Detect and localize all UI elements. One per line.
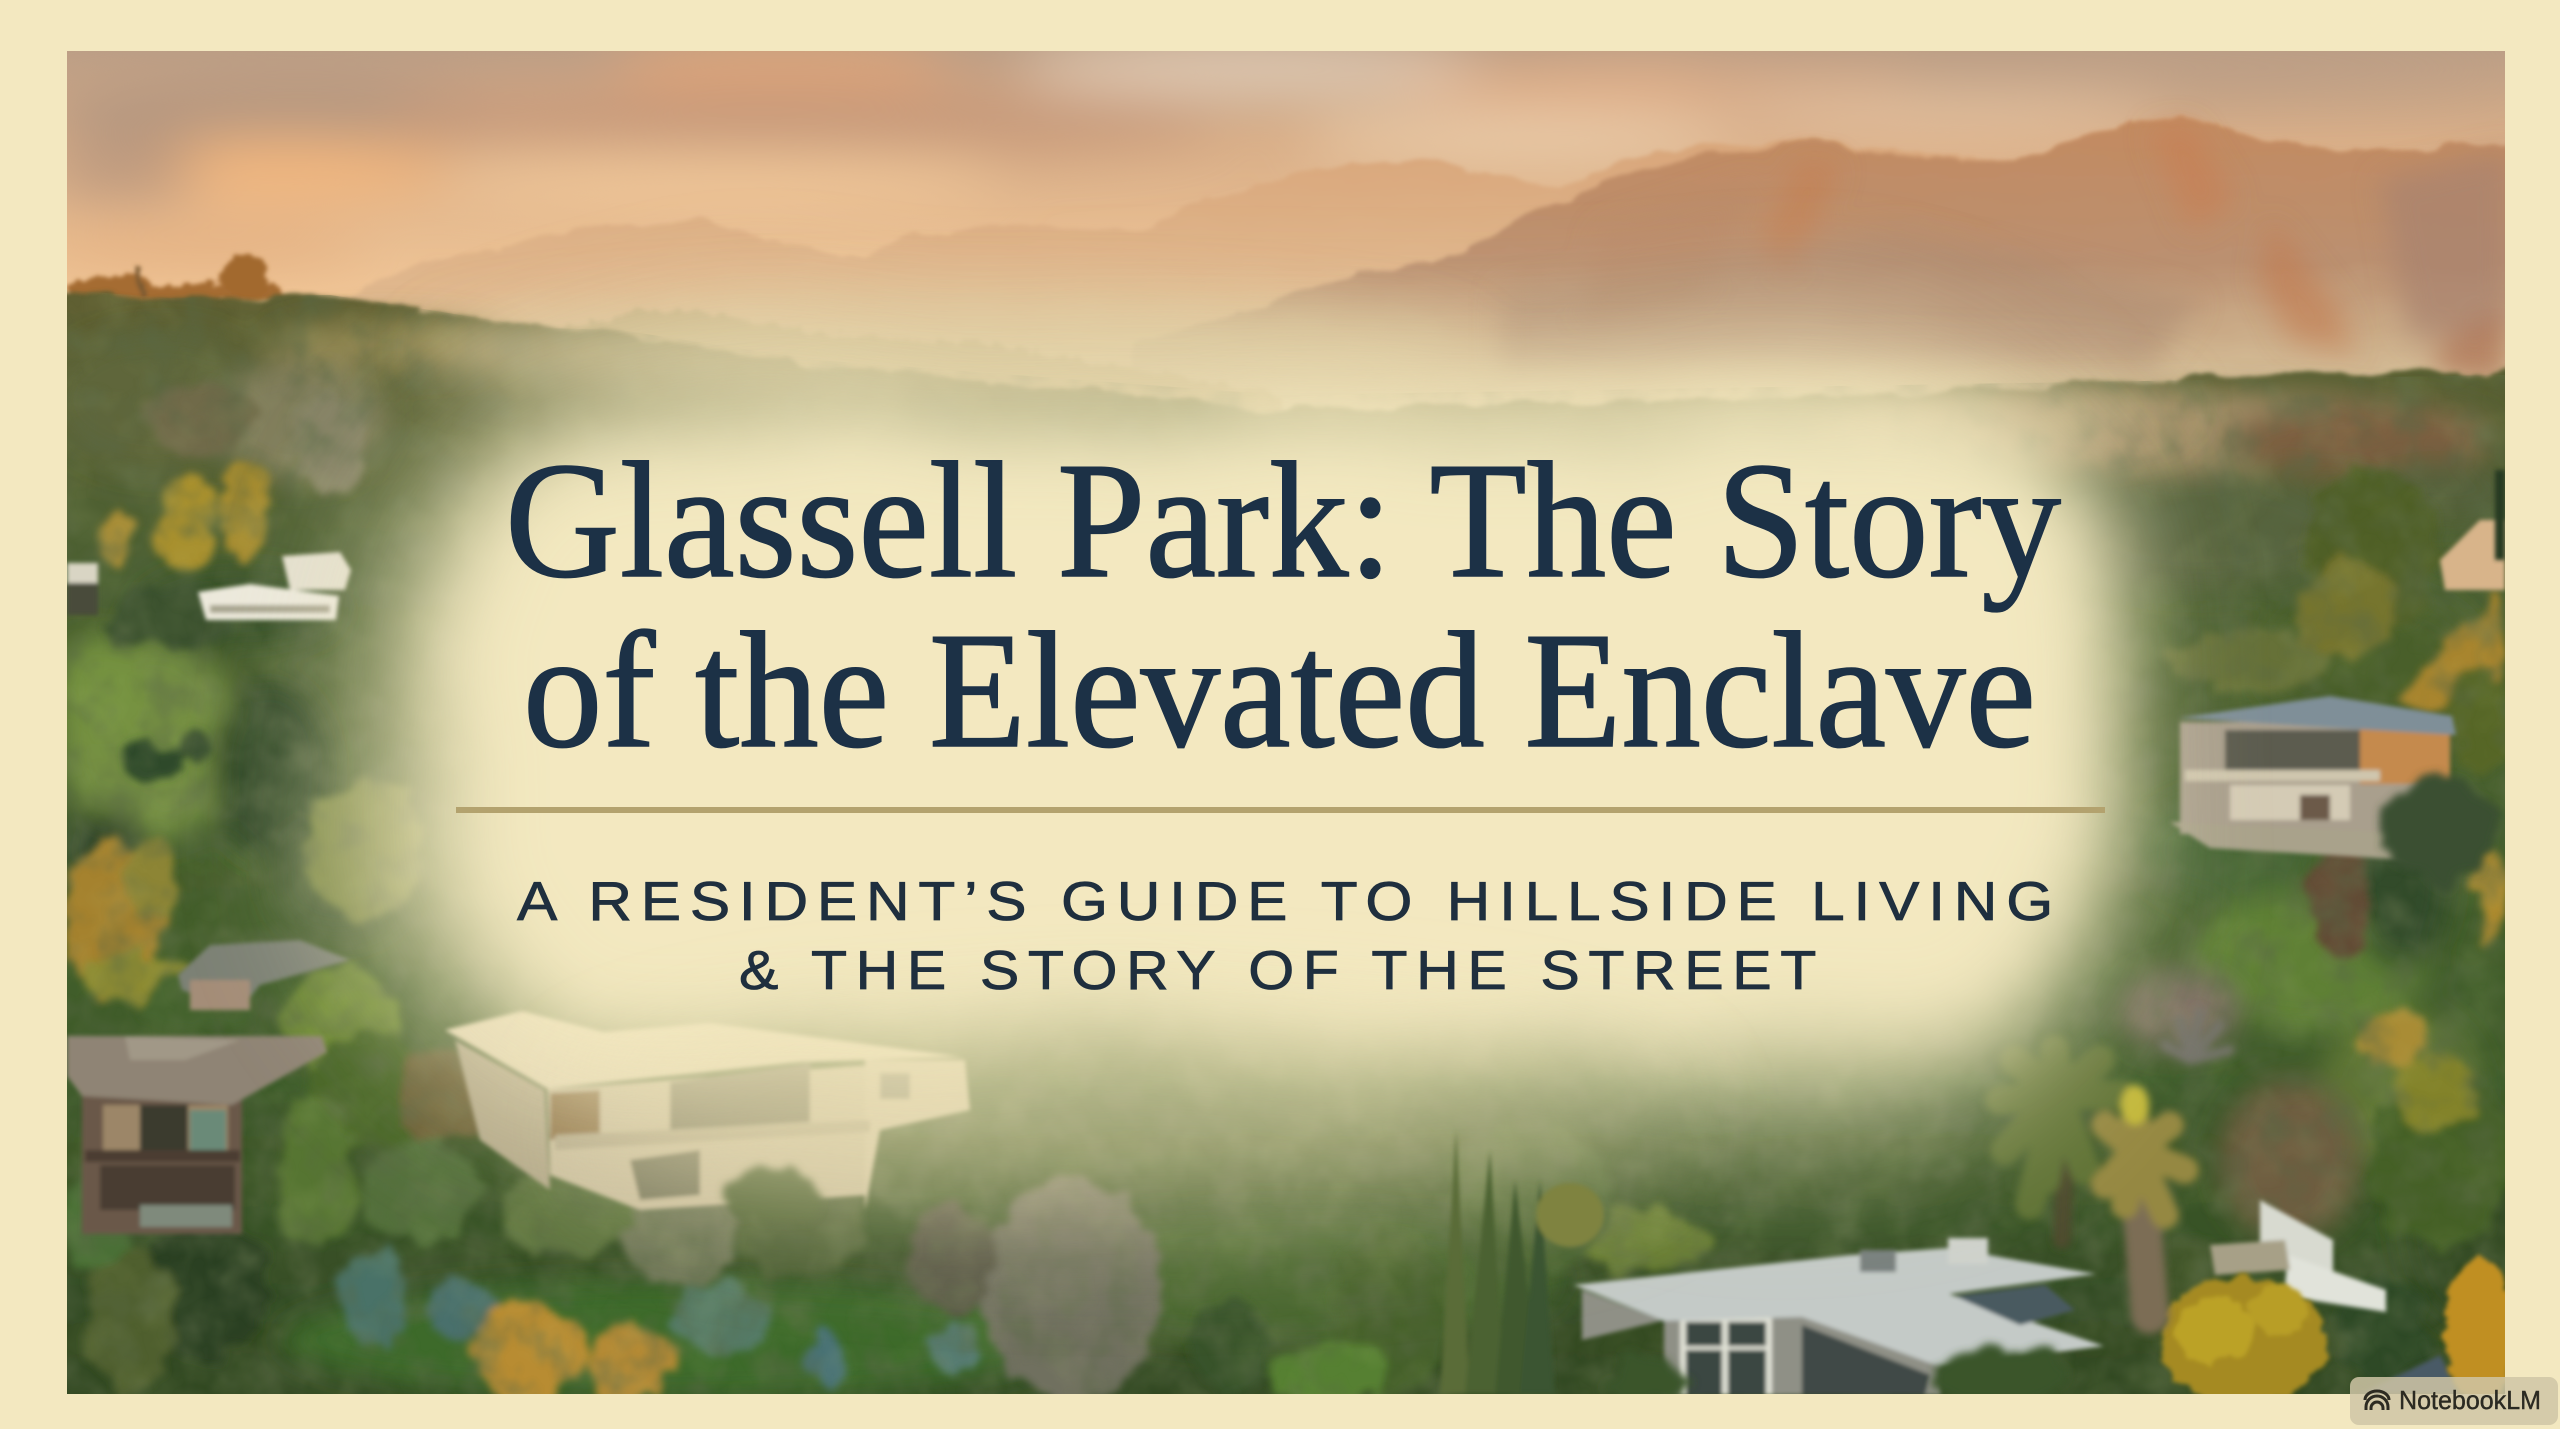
title: Glassell Park: The Story <box>505 428 2061 612</box>
house: bottom left brown home <box>67 1036 327 1234</box>
sky with sunset clouds <box>67 51 2505 302</box>
trees and shrubs on the left slope <box>64 382 2510 1409</box>
NotebookLM watermark badge: NotebookLM <box>2399 1385 2541 1415</box>
house: mid-century cream home <box>445 1011 970 1210</box>
cypress trees <box>1440 1130 1604 1394</box>
left ridge with tree line <box>67 253 1280 520</box>
title <box>505 428 2061 782</box>
palm trees <box>2000 1012 2230 1315</box>
NotebookLM watermark badge <box>2350 1377 2558 1425</box>
icon: NotebookLM arcs <box>2365 1391 2389 1410</box>
subtitle: & THE STORY OF THE STREET <box>739 939 1825 1001</box>
title: of the Elevated Enclave <box>523 598 2036 782</box>
mountain ridges and rock faces <box>1500 125 2510 385</box>
house: upper right hillside home <box>2170 520 2505 860</box>
hillside vegetation patches <box>50 319 2540 1400</box>
far hill haze <box>430 295 2180 445</box>
white retaining walls <box>2210 470 2505 1394</box>
hillside ground <box>40 290 2540 1420</box>
soft foliage mottling <box>67 290 2505 1394</box>
warm fog overlay <box>360 370 2120 1225</box>
house: upper left white homes <box>67 552 351 1010</box>
near mountain face <box>1130 116 2530 440</box>
yellow flowering bushes <box>2159 1258 2516 1404</box>
house: white flat-roof home <box>1574 1238 2104 1395</box>
gold divider rule <box>456 807 2105 813</box>
foreground trees overlapping houses <box>720 775 2495 1406</box>
subtitle: A RESIDENT’S GUIDE TO HILLSIDE LIVING <box>517 870 2062 932</box>
subtitle <box>517 870 2062 1001</box>
far mountain range <box>354 140 1976 320</box>
